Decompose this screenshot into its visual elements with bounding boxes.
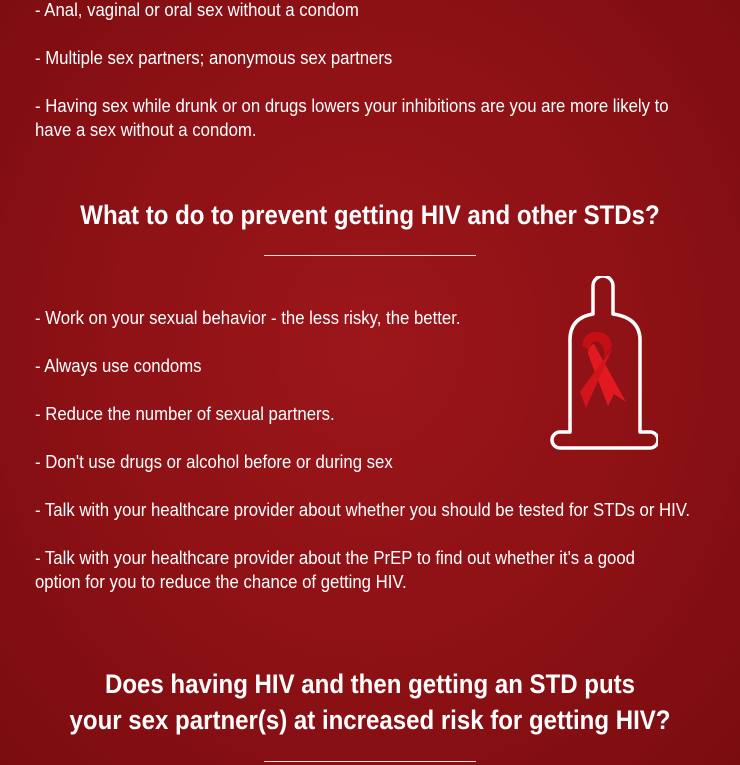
icon: condom with red ribbon: [550, 276, 658, 450]
item: - Reduce the number of sexual partners.: [35, 404, 335, 424]
item: - Talk with your healthcare provider about whether you should be tested for STDs or HIV.: [35, 500, 690, 520]
item: - Work on your sexual behavior - the less risky, the better.: [35, 308, 461, 328]
item: - Don't use drugs or alcohol before or during sex: [35, 452, 393, 472]
heading: risk question: [70, 669, 670, 735]
item 3: - Having sex while drunk or on drugs lowers your inhibitions are you are more likely to: [35, 96, 669, 116]
item 1: - Anal, vaginal or oral sex without a condom: [35, 0, 359, 20]
text: risk factors: [35, 0, 669, 140]
item: - Always use condoms: [35, 356, 202, 376]
item 2: - Multiple sex partners; anonymous sex partners: [35, 48, 392, 68]
item: - Talk with your healthcare provider about the PrEP to find out whether it's a good: [35, 548, 635, 568]
item 3: have a sex without a condom.: [35, 120, 256, 140]
heading: prevention: What to do to prevent getting HIV and other STDs?: [80, 200, 660, 230]
heading: risk question: Does having HIV and then getting an STD puts: [105, 669, 635, 699]
ribbon: [580, 332, 626, 408]
heading: risk question: your sex partner(s) at increased risk for getting HIV?: [70, 705, 670, 735]
item: [35, 548, 635, 592]
item 3: [35, 96, 669, 140]
text: prevention list: [35, 308, 690, 592]
item: option for you to reduce the chance of getting HIV.: [35, 572, 407, 592]
